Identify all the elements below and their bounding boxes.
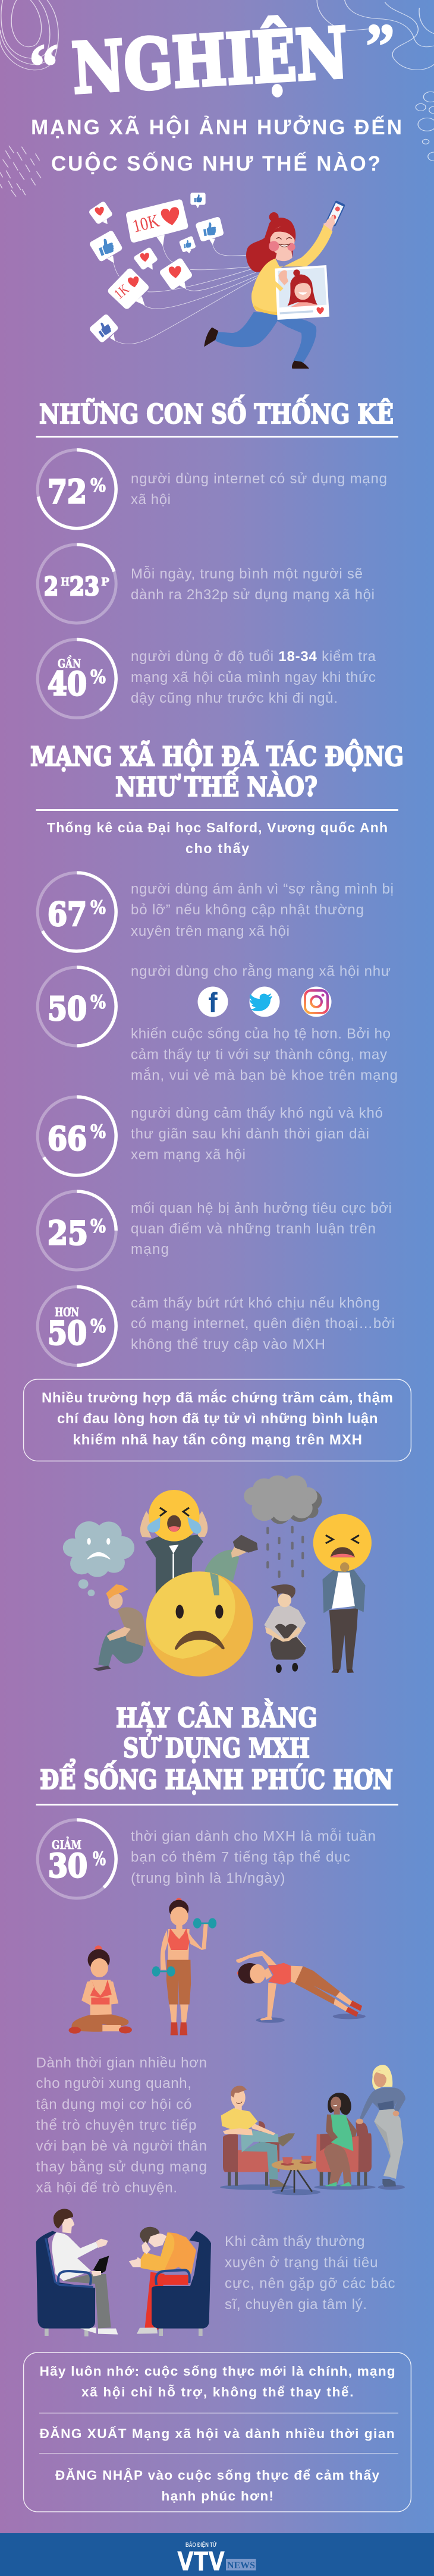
text: see a specialist: sĩ, chuyên gia tâm lý. [225, 2297, 367, 2313]
text: spend time with people: với bạn bè và người thân [36, 2138, 207, 2154]
callout: reminder: ĐĂNG XUẤT Mạng xã hội và dành nhiều thời gian [40, 2426, 395, 2441]
stat: 67%: bỏ lỡ” nếu không cập nhật thường [131, 902, 364, 918]
stat: gần 40%: dậy cũng như trước khi đi ngủ. [131, 690, 338, 706]
coffee table [272, 2156, 321, 2193]
stat: 67%: xuyên trên mạng xã hội [131, 923, 290, 939]
stat: gần 40%: người dùng ở độ tuổi 18-34 kiểm tra [131, 649, 376, 665]
title: NGHIỆN: NGHIỆN [70, 12, 350, 109]
speech bubbles [92, 194, 221, 341]
stat: gần 40%: 40 [48, 665, 87, 703]
stat: hơn 50%: cảm thấy bứt rứt khó chịu nếu không [131, 1295, 380, 1311]
stat: 67%: % [90, 897, 106, 919]
callout: reminder: hạnh phúc hơn! [162, 2489, 273, 2503]
illustration: woman with likes [92, 194, 345, 369]
angry emoji person [313, 1514, 372, 1673]
illustration: woman with likes: 10K [130, 210, 161, 237]
sitting man left [93, 1584, 146, 1671]
callout: consequences: Nhiều trường hợp đã mắc chứng trầm cảm, thậm [42, 1389, 393, 1406]
green man leaning [205, 1535, 258, 1595]
stat: 2h23p: 2 [44, 572, 58, 601]
stat: 66% [37, 1097, 383, 1175]
heading: balance [40, 1699, 393, 1795]
text: spend time with people [36, 2055, 207, 2196]
callout: consequences: chí đau lòng hơn đã tự tử vì những bình luận [57, 1411, 378, 1427]
icon: instagram [301, 987, 332, 1017]
stat: 25%: 25 [48, 1214, 88, 1252]
stat: 66%: người dùng cảm thấy khó ngủ và khó [131, 1105, 383, 1121]
stat: giảm 30%: 30 [48, 1847, 87, 1885]
stat: 25%: quan điểm và những tranh luận trên [131, 1221, 376, 1237]
illustration: sad emojis and people [63, 1476, 372, 1677]
left armchair and man [221, 2086, 295, 2187]
stat: giảm 30% [37, 1820, 376, 1898]
title: NGHIỆN: “ [29, 32, 58, 102]
stat: 25%: mối quan hệ bị ảnh hưởng tiêu cực bởi [131, 1200, 392, 1216]
callout: reminder: xã hội chỉ hỗ trợ, không thể thay thế. [81, 2385, 353, 2399]
callout: consequences: khiếm nhã hay tấn công mạng trên MXH [73, 1432, 362, 1448]
text: spend time with people: Dành thời gian nhiều hơn [36, 2055, 207, 2071]
connector lines [114, 245, 275, 344]
stat: 50% [37, 963, 398, 1083]
text: see a specialist: Khi cảm thấy thường [225, 2234, 365, 2250]
source text: Thống kê của Đại học Salford, Vương quốc Anh [47, 820, 388, 835]
stat: 25%: % [90, 1216, 106, 1237]
stat: 25%: mạng [131, 1241, 169, 1257]
stat: 66%: thư giãn sau khi dành thời gian dài [131, 1126, 369, 1142]
stat: 50%: % [90, 992, 106, 1013]
stat: giảm 30%: bạn có thêm 7 tiếng tập thể dục [131, 1849, 350, 1866]
right armchair and woman [316, 2093, 372, 2186]
stat: giảm 30%: % [93, 1848, 106, 1870]
stat: hơn 50%: có mạng internet, quên điện thoại…bởi [131, 1316, 395, 1332]
stat: 50%: 50 [48, 989, 87, 1027]
illustration: friends on sofas [220, 2065, 405, 2195]
thought cloud [63, 1521, 134, 1596]
text: see a specialist [225, 2234, 395, 2313]
woman figure [204, 200, 345, 369]
text: spend time with people: tận dụng mọi cơ hội có [36, 2096, 191, 2113]
stat: giảm 30%: GIẢM [52, 1836, 81, 1852]
text: see a specialist: cực, nên gặp gỡ các bác [225, 2276, 395, 2291]
stat: 72%: người dùng internet có sử dụng mạng [131, 471, 387, 487]
title: NGHIỆN: ” [366, 11, 395, 82]
stat: hơn 50%: % [90, 1316, 106, 1337]
rain cloud [244, 1476, 322, 1578]
patient in chair [129, 2227, 211, 2336]
stat: giảm 30%: thời gian dành cho MXH là mỗi tuần [131, 1829, 376, 1844]
seated meditation [68, 1945, 132, 2034]
callout: reminder [24, 2352, 411, 2512]
icon: facebook: f [208, 987, 218, 1018]
standing woman [356, 2065, 405, 2187]
subtitle [31, 115, 402, 175]
stat: 50%: người dùng cho rằng mạng xã hội như [131, 963, 391, 980]
stat: 2h23p: 23 [70, 572, 99, 601]
text: spend time with people: xã hội để trò chuyện. [36, 2179, 177, 2196]
heading: impact: NHƯ THẾ NÀO? [115, 768, 317, 803]
stat: 72%: xã hội [131, 492, 171, 508]
icon: facebook [197, 987, 228, 1018]
stat: giảm 30%: (trung bình là 1h/ngày) [131, 1870, 285, 1886]
crouching person [264, 1584, 306, 1673]
side plank [236, 1951, 366, 2023]
callout: consequences [24, 1379, 411, 1461]
text: see a specialist: xuyên ở trạng thái tiêu [225, 2254, 378, 2271]
stat: 72%: % [90, 475, 106, 496]
stat: hơn 50%: 50 [48, 1314, 87, 1352]
crying emoji person [140, 1490, 207, 1597]
stat: 67% [37, 873, 394, 951]
big sad emoji [146, 1571, 253, 1677]
text: spend time with people: cho người xung quanh, [36, 2075, 191, 2091]
stat: 72% [37, 450, 387, 529]
heading: impact [30, 739, 404, 803]
stat: 2h23p: Mỗi ngày, trung bình một người sẽ [131, 566, 363, 582]
stat: gần 40% [37, 640, 376, 718]
heading: balance: HÃY CÂN BẰNG [116, 1699, 317, 1734]
illustration: therapy session [36, 2209, 211, 2336]
footer: VTV News: BÁO ĐIỆN TỬ [185, 2541, 217, 2549]
stat: 2h23p: P [101, 575, 109, 589]
footer: VTV News: NEWS [227, 2561, 255, 2571]
footer: VTV News: VTV [177, 2547, 225, 2576]
stat: 50%: cảm thấy tự ti với sự thành công, may [131, 1046, 387, 1063]
decorative line art top [0, 0, 434, 197]
heading: balance: SỬ DỤNG MXH [123, 1729, 310, 1764]
source text [47, 820, 388, 856]
stat: hơn 50%: HƠN [55, 1305, 79, 1319]
footer: VTV News [0, 2533, 434, 2576]
floor shadows [220, 2184, 405, 2195]
stat: 50%: khiến cuộc sống của họ tệ hơn. Bởi họ [131, 1026, 391, 1042]
source text: cho thấy [185, 841, 249, 856]
standing dumbbells [152, 1898, 216, 2035]
text: spend time with people: thay bằng sử dụng mạng [36, 2159, 207, 2175]
callout: reminder: ĐĂNG NHẬP vào cuộc sống thực để cảm thấy [55, 2468, 379, 2483]
stat: 2h23p [37, 545, 375, 623]
therapist in chair [36, 2209, 118, 2336]
stat: 67%: người dùng ám ảnh vì “sợ rằng mình bị [131, 881, 394, 897]
icon: twitter [250, 987, 279, 1017]
callout: reminder: Hãy luôn nhớ: cuộc sống thực mới là chính, mạng [40, 2364, 395, 2379]
illustration: woman with likes: 1K [112, 281, 133, 303]
illustration: exercise [68, 1898, 366, 2035]
stat: gần 40%: % [90, 666, 106, 688]
stat: 50%: mắn, vui vẻ mà bạn bè khoe trên mạng [131, 1068, 398, 1083]
stat: 25% [37, 1191, 392, 1270]
stat: 67%: 67 [48, 895, 87, 933]
stat: 66%: % [90, 1121, 106, 1143]
text: spend time with people: thể trò chuyện trực tiếp [36, 2118, 196, 2133]
stat: 2h23p: H [61, 575, 70, 589]
stat: 66%: 66 [48, 1119, 87, 1158]
stat: hơn 50%: không thể truy cập vào MXH [131, 1336, 325, 1353]
stat: 2h23p: dành ra 2h32p sử dụng mạng xã hội [131, 587, 375, 603]
subtitle: MẠNG XÃ HỘI ẢNH HƯỞNG ĐẾN [31, 115, 402, 139]
subtitle: CUỘC SỐNG NHƯ THẾ NÀO? [51, 152, 380, 175]
stat: 72%: 72 [48, 473, 87, 511]
stat: gần 40%: GẦN [58, 655, 81, 671]
stat: hơn 50% [37, 1287, 395, 1365]
stat: gần 40%: mạng xã hội của mình ngay khi thức [131, 669, 376, 685]
stat: 66%: xem mạng xã hội [131, 1147, 246, 1163]
